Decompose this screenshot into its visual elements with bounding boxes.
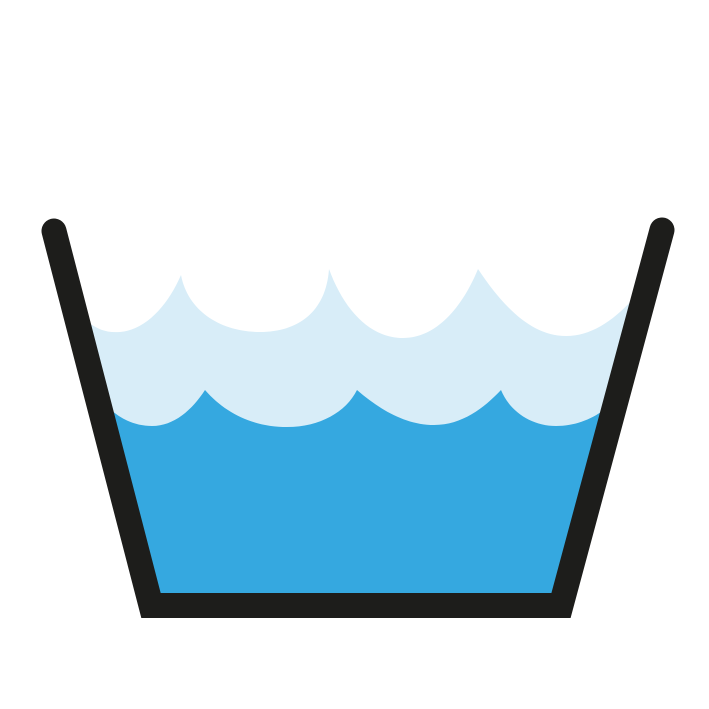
light blue upper water wave [88,269,632,450]
dark blue lower water [110,390,604,600]
basin outline [54,230,662,606]
